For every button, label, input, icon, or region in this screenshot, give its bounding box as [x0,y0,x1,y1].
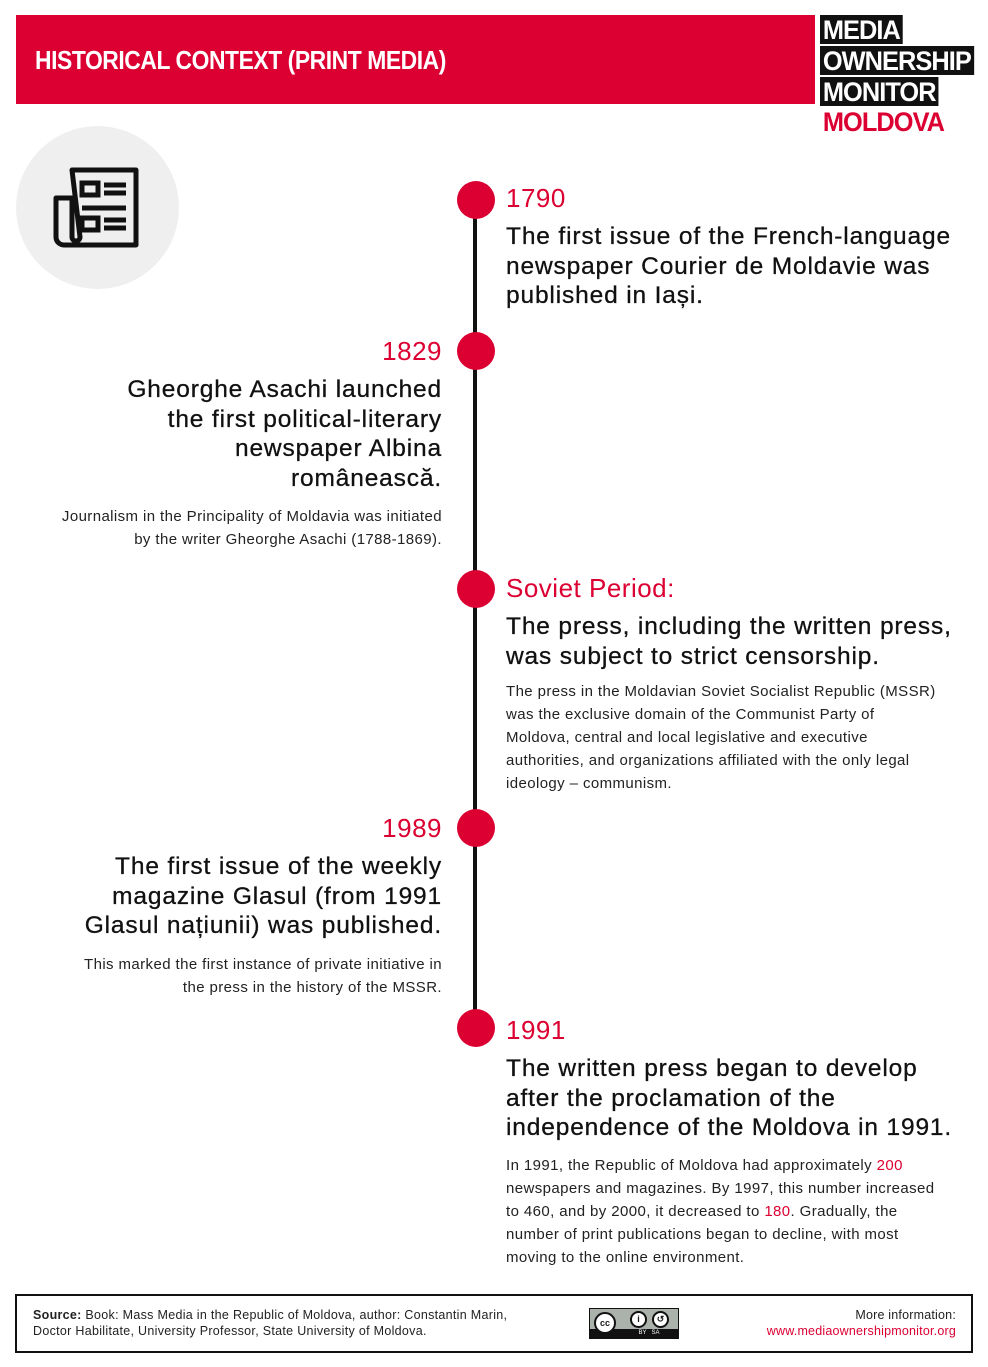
event 1991: after the proclamation of the [506,1084,836,1112]
event 1790: newspaper Courier de Moldavie was [506,252,930,280]
event 1989: magazine Glasul (from 1991 [112,882,442,910]
event 1829: românească. [291,464,442,492]
title: HISTORICAL CONTEXT (PRINT MEDIA) [35,45,446,75]
event 1790 [506,183,951,309]
source text [33,1308,507,1338]
event soviet: The press in the Moldavian Soviet Socialist Republic (MSSR) [506,683,936,700]
logo: OWNERSHIP [823,46,971,76]
event 1991: The written press began to develop [506,1055,918,1082]
more info [766,1308,956,1338]
source text: Doctor Habilitate, University Professor, State University of Moldova. [33,1324,427,1338]
icon: cc license: ↺ [657,1314,664,1324]
dot 1989 [457,809,495,847]
event 1991: moving to the online environment. [506,1248,744,1266]
event 1989 [84,813,442,996]
logo: MONITOR [823,77,936,107]
event 1991: newspapers and magazines. By 1997, this number increased [506,1180,934,1196]
event 1989: This marked the first instance of private initiative in [84,956,442,972]
icon: cc license [589,1308,679,1339]
event 1989: The first issue of the weekly [115,853,442,880]
event 1829 [62,336,442,548]
dot soviet [457,570,495,608]
event 1991: to 460, and by 2000, it decreased to 180. Gradually, the [506,1202,898,1220]
event soviet: Moldova, central and local legislative and executive [506,729,868,746]
event 1991: In 1991, the Republic of Moldova had approximately 200 [506,1156,903,1174]
more info: www.mediaownershipmonitor.org [767,1324,956,1338]
icon: newspaper [16,126,179,289]
event 1829: Gheorghe Asachi launched [127,376,442,403]
icon: cc license: BY SA [639,1330,659,1336]
event 1989: 1989 [382,813,442,843]
event 1989: the press in the history of the MSSR. [183,978,442,996]
event 1829: the first political-literary [168,406,442,432]
header bar [16,15,815,104]
event 1829: Journalism in the Principality of Moldavia was initiated [62,508,442,525]
event 1829: by the writer Gheorghe Asachi (1788-1869). [134,531,442,548]
event soviet: was subject to strict censorship. [506,642,880,670]
event 1790: published in Iași. [506,282,704,309]
source text: Source: Book: Mass Media in the Republic of Moldova, author: Constantin Marin, [33,1308,507,1322]
event 1829: 1829 [382,336,442,366]
event 1991: 1991 [506,1015,566,1045]
event soviet: authorities, and organizations affiliated with the only legal [506,752,910,769]
event soviet: ideology – communism. [506,775,672,792]
footer [15,1294,973,1353]
event soviet: Soviet Period: [506,573,675,603]
event 1790: The first issue of the French-language [506,223,951,250]
logo [820,15,974,137]
event 1991 [506,1015,952,1266]
event 1790: 1790 [506,183,566,213]
logo: MEDIA [823,15,900,45]
event soviet: The press, including the written press, [506,613,952,640]
event 1989: Glasul națiunii) was published. [85,912,442,939]
event 1991: number of print publications began to decline, with most [506,1226,899,1242]
event soviet: was the exclusive domain of the Communist Party of [506,706,874,723]
more info: More information: [855,1308,956,1322]
event soviet [506,573,952,792]
timeline line [473,200,477,1030]
dot 1991 [457,1009,495,1047]
event 1991: independence of the Moldova in 1991. [506,1114,952,1141]
icon: cc license: i [637,1314,640,1324]
dot 1790 [457,181,495,219]
event 1829: newspaper Albina [235,435,442,462]
icon: cc license: cc [600,1318,610,1328]
logo: MOLDOVA [823,107,944,137]
dot 1829 [457,332,495,370]
